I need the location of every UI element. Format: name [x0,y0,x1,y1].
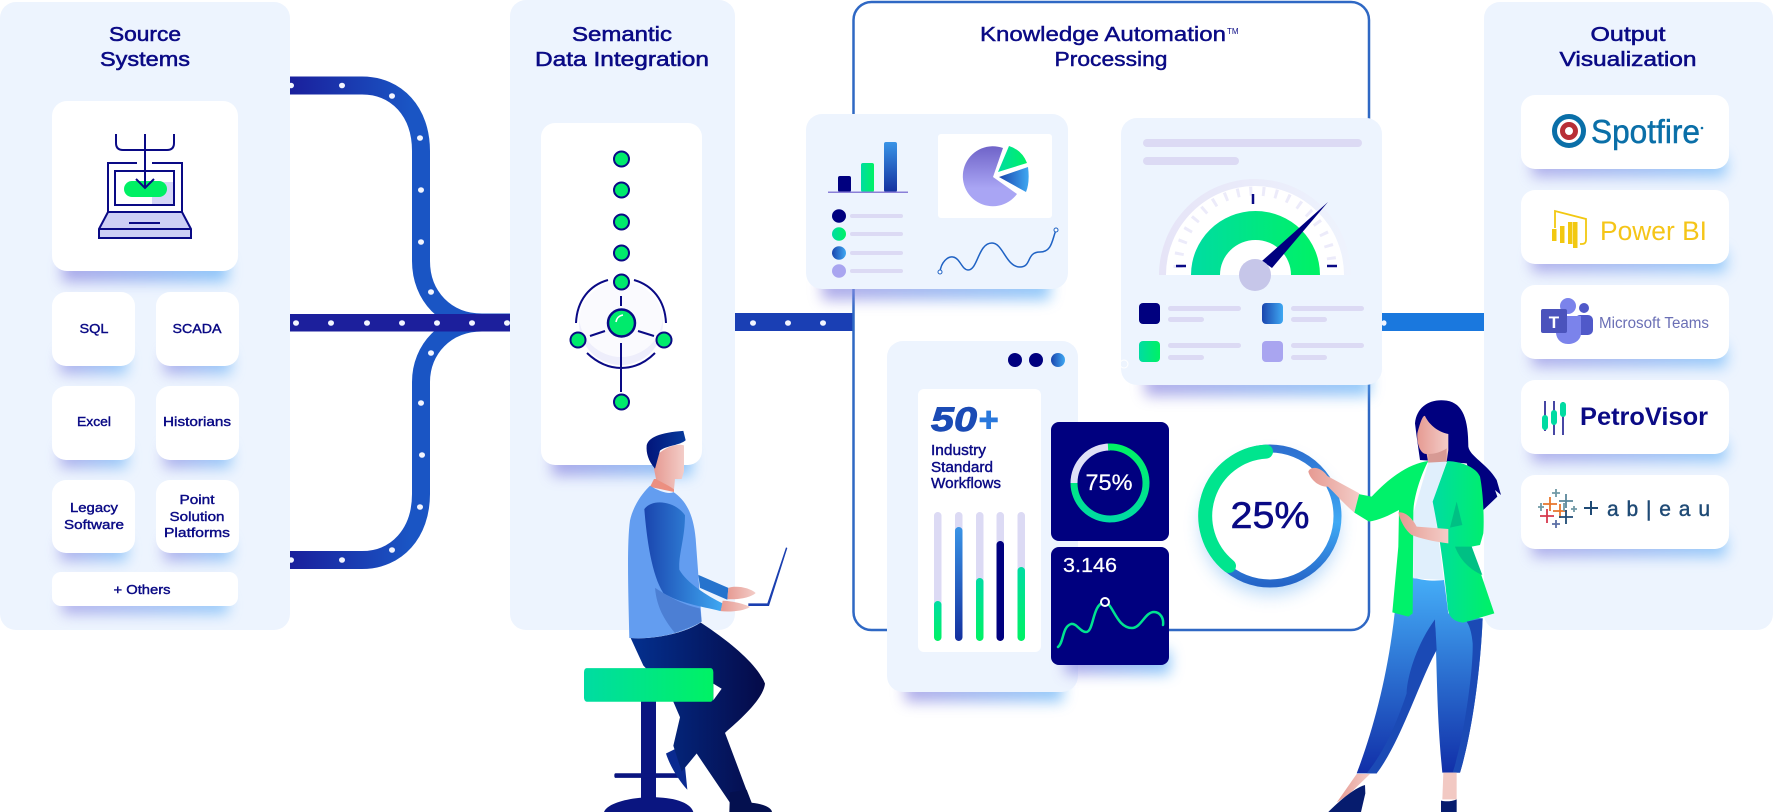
dashboard card: gauge [1120,118,1382,396]
card: Legacy Software: Legacy [70,500,119,515]
heading: source systems [100,23,190,71]
heading: knowledge automation processing [980,23,1239,71]
dashboard card: charts [806,114,1068,300]
logo card: Power BI: Power BI [1600,216,1707,246]
heading: source systems: Systems [100,48,190,71]
card: SQL [52,292,135,374]
gauge meter [1159,179,1351,291]
card: Point Solution Platforms: Platforms [164,525,231,540]
stat card: 75%: 75% [1086,470,1132,495]
card: + Others [52,572,238,614]
legend [832,209,903,278]
logo card: Microsoft Teams: Microsoft Teams [1599,315,1709,332]
donut chart: 25% [1202,448,1338,594]
donut chart: 25%: 25% [1230,495,1310,536]
stat: 50+ workflows: 50 [931,401,977,439]
card: SCADA [156,292,239,374]
heading: output visualization: Visualization [1560,48,1696,71]
card: Point Solution Platforms [156,480,239,561]
heading: knowledge automation processing: Knowledge Automation [980,23,1226,46]
gauge legend [1139,303,1364,362]
stat card: 3.146 line chart [1051,547,1170,674]
logo card: Tableau [1521,475,1729,557]
bar chart [828,142,908,193]
heading: knowledge automation processing: Processing [1054,48,1168,71]
card: Legacy Software [52,480,135,561]
card: Point Solution Platforms: Solution [170,509,224,524]
panel: output visualization [1484,2,1773,630]
card: + Others: + Others [114,582,171,597]
heading: output visualization [1560,23,1696,71]
stat: 50+ workflows: Standard [931,460,993,476]
pie chart [938,134,1052,218]
heading: knowledge automation processing: TM [1227,27,1239,36]
card: Historians: Historians [163,414,232,429]
logo card: Spotfire [1521,95,1729,177]
card: SCADA: SCADA [172,321,222,336]
stat: 50+ workflows: Industry [931,443,987,459]
figure: standing woman presenting [1308,400,1501,812]
logo card: PetroVisor [1521,380,1729,462]
vertical bars [934,512,1025,641]
logo card: Microsoft Teams [1521,285,1729,367]
stat card: 3.146 line chart: 3.146 [1063,555,1117,577]
stat: 50+ workflows: + [978,401,998,439]
logo card: Spotfire: Spotfire [1591,113,1700,150]
card: Excel: Excel [77,414,111,429]
panel: source systems [0,2,290,630]
connector: integration to processing [735,313,853,331]
panel: knowledge automation processing outline [854,2,1369,630]
heading: source systems: Source [109,23,181,46]
heading: output visualization: Output [1590,23,1666,46]
dashboard card: workflows [887,341,1078,702]
stat: 50+ workflows: Workflows [931,476,1001,492]
line chart [938,228,1058,274]
logo card: Tableau: ab|eau [1607,498,1710,521]
heading: semantic data integration [535,23,709,71]
connector: processing to output [1370,313,1486,331]
heading: semantic data integration: Data Integration [535,48,709,71]
card: SQL: SQL [80,321,108,336]
card: graph network [541,123,702,476]
card: Legacy Software: Software [64,517,124,532]
logo card: Microsoft Teams: T [1549,313,1560,332]
stat card: 75% [1051,422,1169,541]
panel: semantic data integration [510,0,735,630]
card: Point Solution Platforms: Point [180,492,215,507]
logo card: PetroVisor: PetroVisor [1580,403,1708,431]
stat: 50+ workflows [931,401,1001,492]
connector pipes: source systems to semantic integration [288,83,510,563]
figure: seated man with laptop [584,431,787,812]
logo card: Power BI [1521,190,1729,272]
heading: semantic data integration: Semantic [572,23,672,46]
card: laptop icon [52,101,238,282]
card: Excel [52,386,135,468]
card: Historians [156,386,239,468]
